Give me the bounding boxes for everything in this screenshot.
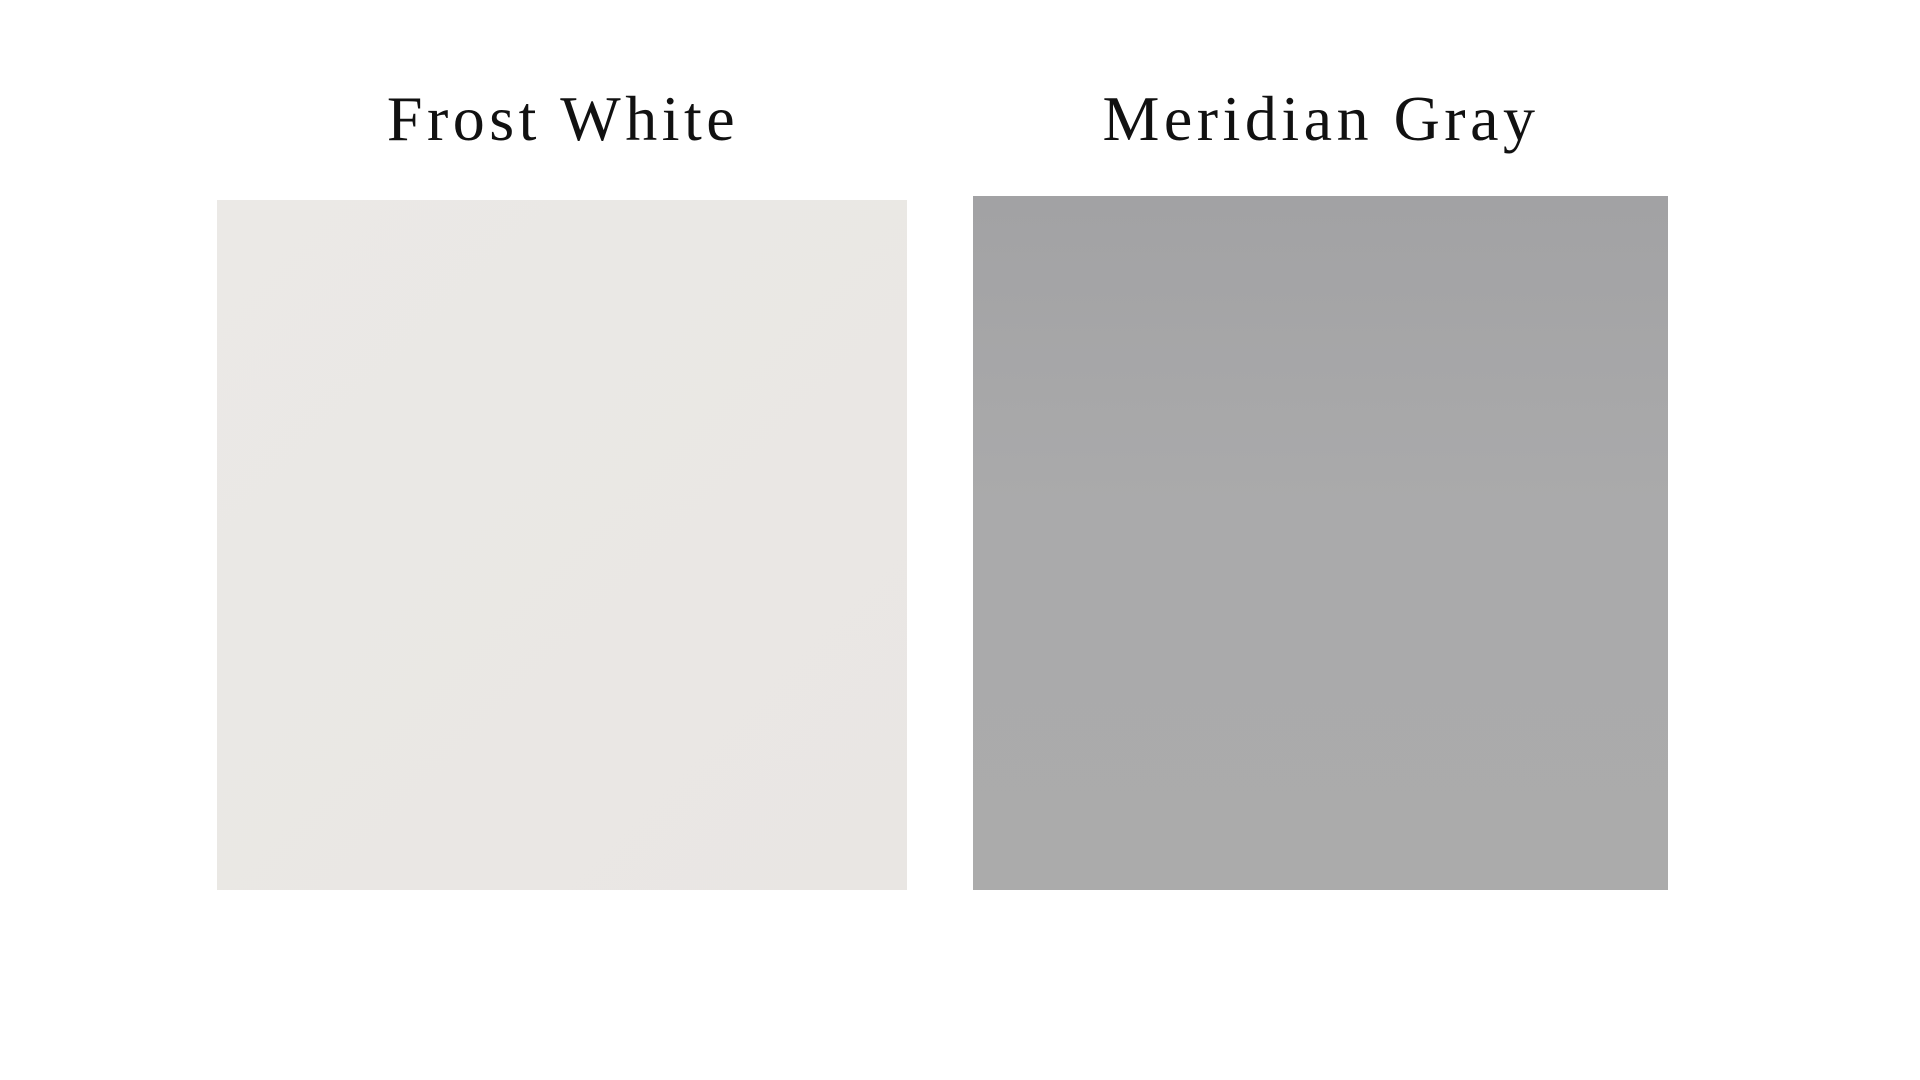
heading: Frost White: Frost White (387, 83, 739, 154)
panel: frost white (217, 83, 907, 890)
heading: Meridian Gray: Meridian Gray (1102, 83, 1540, 154)
swatch: frost white (217, 200, 907, 890)
panel: meridian gray (973, 83, 1668, 890)
swatch: meridian gray (973, 196, 1668, 890)
